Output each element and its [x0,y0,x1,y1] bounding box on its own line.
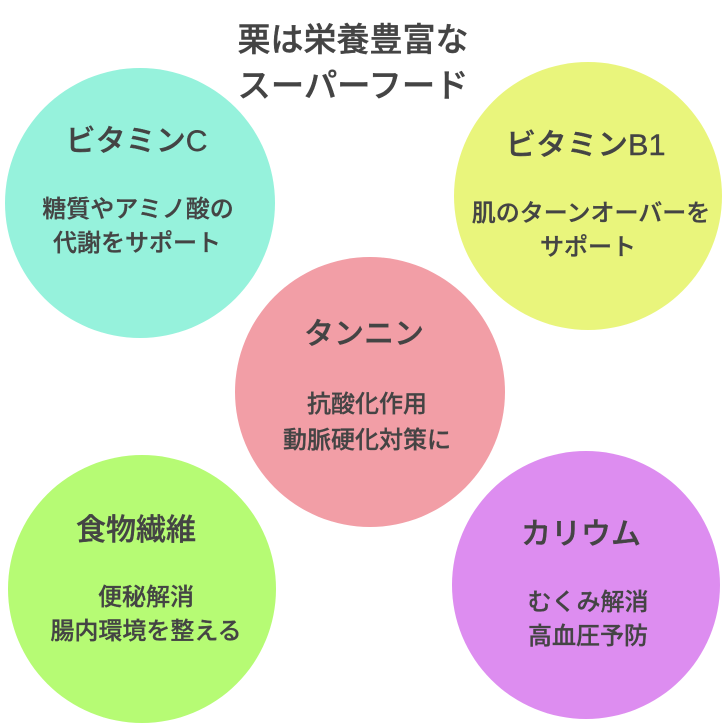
text: potassium description [528,589,648,650]
panel: potassium [452,451,720,719]
text: dietary fiber description: 腸内環境を整える [50,618,242,645]
panel: dietary fiber [8,455,276,723]
title: 栗は栄養豊富な [238,21,468,58]
text: dietary fiber description [50,584,242,645]
text: tannin description: 動脈硬化対策に [283,427,451,454]
text: vitamin B1 description [472,200,710,261]
title: スーパーフード [238,67,468,104]
heading: tannin: タンニン [304,318,424,351]
heading: vitamin B1: ビタミンB1 [506,129,666,162]
panel: vitamin C [5,68,275,338]
title [238,21,468,104]
text: vitamin B1 description: サポート [540,234,636,261]
text: vitamin C description: 代謝をサポート [53,230,221,257]
panel: vitamin B1 [454,62,722,330]
text: vitamin C description [42,196,234,257]
text: potassium description: 高血圧予防 [528,623,648,650]
heading: dietary fiber: 食物繊維 [76,514,196,547]
panel: tannin [235,257,505,527]
text: tannin description [283,391,451,454]
text: potassium description: むくみ解消 [528,589,648,616]
text: dietary fiber description: 便秘解消 [98,584,194,611]
text: tannin description: 抗酸化作用 [307,391,427,418]
heading: vitamin C: ビタミンC [66,125,208,158]
text: vitamin C description: 糖質やアミノ酸の [42,196,234,223]
text: vitamin B1 description: 肌のターンオーバーを [472,200,710,227]
heading: potassium: カリウム [521,518,641,551]
